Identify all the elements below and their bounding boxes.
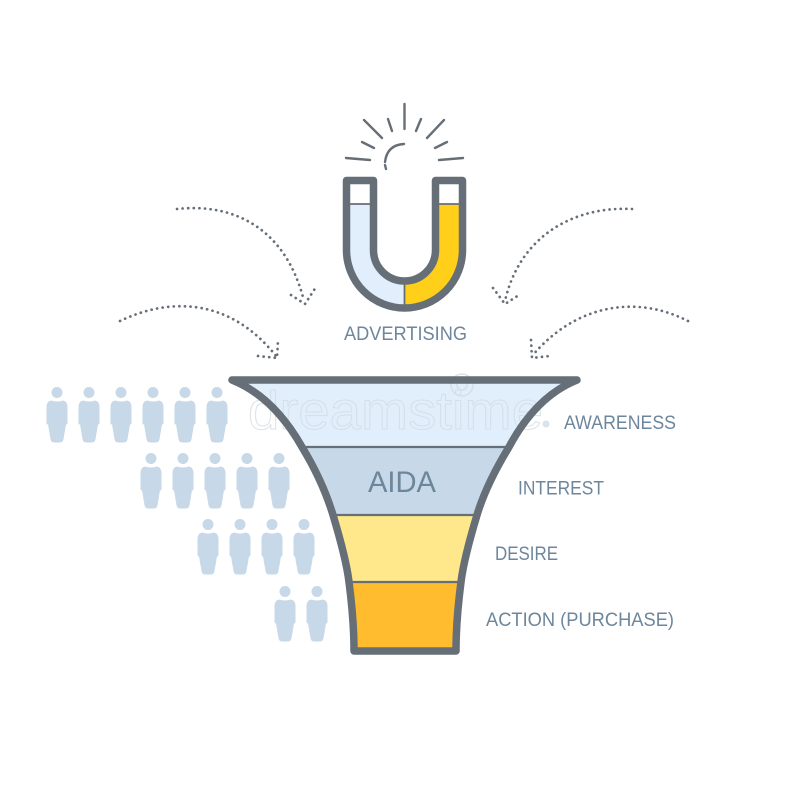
- magnet outline: [346, 180, 462, 308]
- funnel stage: desire: [333, 515, 477, 582]
- label: desire: DESIRE: [495, 544, 558, 565]
- label: interest: INTEREST: [518, 478, 604, 500]
- people: row 2: [140, 453, 290, 508]
- watermark: dreamstime: [248, 381, 543, 441]
- funnel: [232, 374, 577, 651]
- funnel stage: awareness: [232, 380, 577, 447]
- arrow: lower right: [531, 307, 688, 358]
- arrow: lower left: [120, 306, 278, 358]
- funnel outline: [232, 380, 577, 651]
- label: awareness: AWARENESS: [564, 413, 676, 434]
- label: advertising: ADVERTISING: [344, 324, 467, 345]
- people: row 3: [198, 519, 314, 574]
- arrow: upper left: [177, 208, 316, 304]
- icon: magnet with sparks: [346, 104, 463, 308]
- label: action: ACTION (PURCHASE): [486, 610, 674, 631]
- magnet left leg fill: [349, 204, 404, 306]
- funnel dividers: [302, 447, 509, 582]
- arrow: upper right: [493, 209, 632, 304]
- people: row 4: [274, 586, 328, 642]
- icon: sparks: [346, 104, 463, 169]
- funnel stage: interest: [302, 447, 509, 515]
- label: AIDA: AIDA: [368, 466, 436, 499]
- funnel stage: action: [349, 582, 461, 651]
- people: row 1: [46, 387, 228, 442]
- magnet right leg fill: [404, 204, 460, 306]
